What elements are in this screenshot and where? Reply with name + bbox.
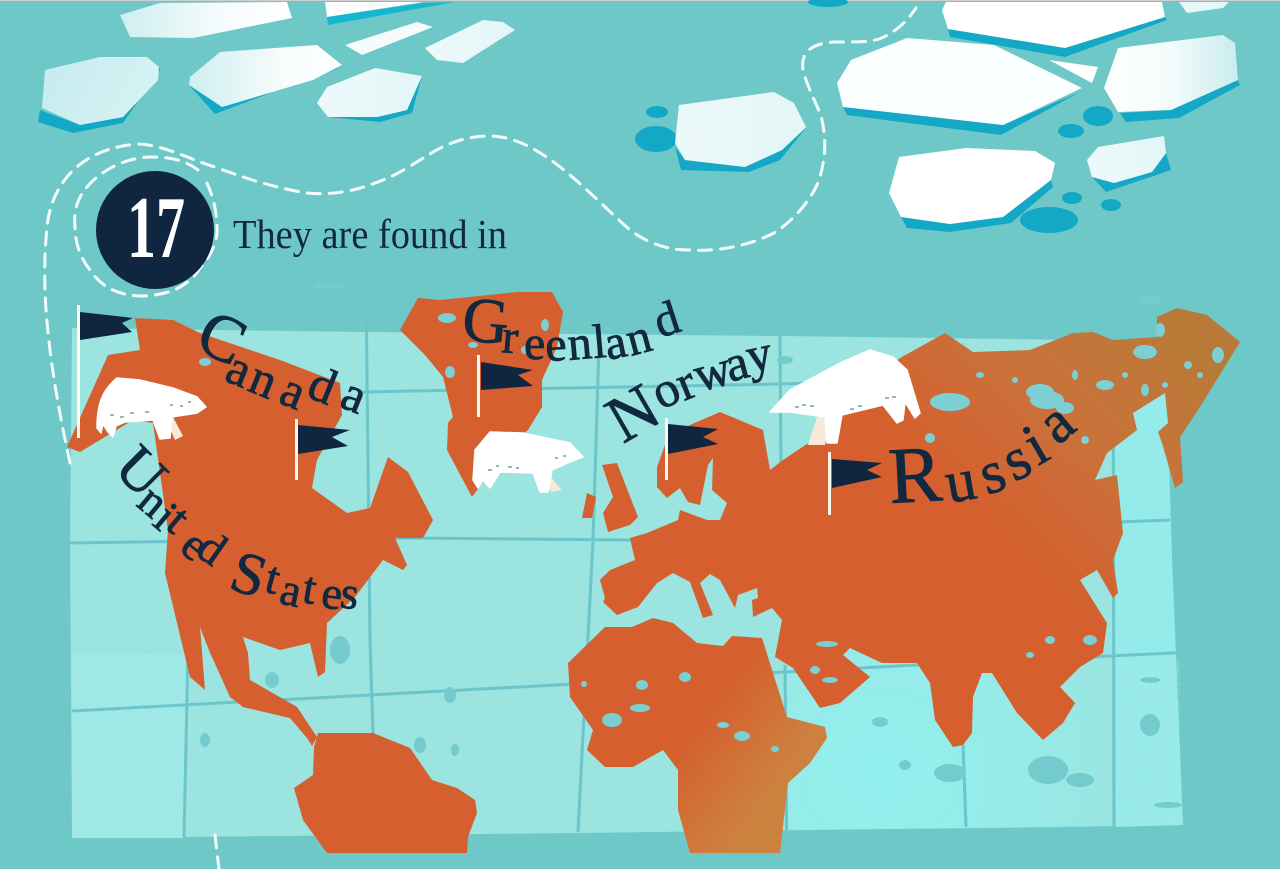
- polar bear: Alaska: [97, 378, 206, 440]
- ice floe: [38, 57, 160, 133]
- polar bear: Russia: [770, 350, 920, 445]
- flag: Greenland: [477, 355, 533, 417]
- land: Eurasia: [600, 308, 1240, 747]
- water puddles: [1020, 106, 1121, 233]
- flag: Alaska: [77, 305, 133, 438]
- polar bear: Greenland: [473, 432, 583, 492]
- ice sliver: [1049, 60, 1098, 83]
- land texture: ocean-coloured flecks: [199, 313, 1224, 752]
- land: North America: [67, 318, 433, 746]
- ice floes top right: [837, 2, 1240, 233]
- ice floe: [425, 20, 515, 63]
- panel: speckled lower-left strip: [72, 654, 190, 838]
- ice floe: [1087, 136, 1171, 192]
- ice floes centre: [635, 0, 848, 172]
- water puddles: [635, 0, 848, 152]
- land: Africa: [568, 618, 827, 853]
- ice floe: [942, 2, 1167, 57]
- label: Norway: Norway: [594, 324, 777, 457]
- label: United States: United States: [0, 0, 362, 620]
- ice floe: [325, 2, 455, 25]
- ice floe: [675, 92, 806, 172]
- ice floe: [317, 68, 422, 122]
- label: Greenland: Greenland: [460, 283, 686, 372]
- ice floe: [1179, 2, 1229, 13]
- land: Iceland: [582, 493, 596, 518]
- ice sliver: [345, 22, 433, 55]
- intro text: They are found in: [233, 211, 507, 257]
- dashed route: [45, 8, 916, 869]
- land: Greenland: [400, 292, 563, 497]
- label: Russia: Russia: [886, 388, 1087, 521]
- speckle texture: [72, 654, 1180, 838]
- label: Canada: Canada: [187, 295, 375, 425]
- continents: [67, 292, 1240, 853]
- ice floe: [120, 2, 292, 38]
- ocean texture specks: [200, 283, 1182, 808]
- ice floe: [189, 45, 342, 114]
- ice floes top left: [38, 2, 515, 133]
- ice floe: [1104, 35, 1240, 122]
- flag: Russia: [828, 452, 882, 515]
- number badge: [96, 171, 214, 289]
- panel: light map sheet: [70, 328, 1183, 838]
- flag: Norway: [665, 418, 718, 480]
- map grid lines: [68, 270, 1215, 869]
- ice floe: [837, 38, 1082, 135]
- panel: bright glow on lower-right: [785, 560, 1114, 830]
- panel: bright strip on right: [1115, 395, 1183, 827]
- flag: Canada: [295, 419, 350, 480]
- number badge: 17: [127, 180, 185, 277]
- land: British Isles: [602, 463, 638, 532]
- land: South America: [294, 733, 477, 853]
- ice floe: [889, 148, 1055, 232]
